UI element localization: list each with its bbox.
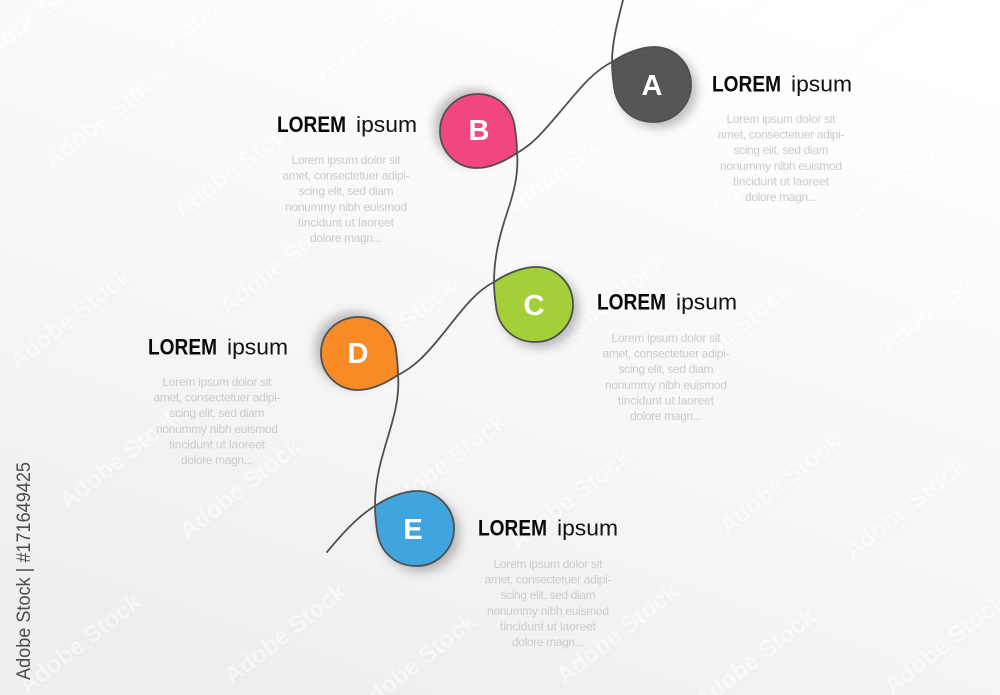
body E: tincidunt ut laoreet (500, 619, 597, 633)
drop E: E (403, 514, 423, 546)
heading B: LOREM (277, 112, 346, 137)
text block D (148, 334, 288, 467)
drop D: D (348, 338, 368, 370)
body D (154, 375, 280, 467)
body A: nonummy nibh euismod (720, 159, 842, 173)
stock id vertical text: Adobe Stock | #171649425 (14, 462, 35, 680)
text block E (478, 516, 618, 649)
body D: nonummy nibh euismod (156, 422, 278, 436)
body D: amet, consectetuer adipi- (154, 391, 280, 405)
body D: tincidunt ut laoreet (169, 437, 266, 451)
drop E (375, 491, 454, 566)
watermark pattern: Adobe Stock (551, 578, 684, 690)
watermark pattern: Adobe Stock (839, 453, 972, 565)
heading C: ipsum (676, 290, 737, 314)
body C: amet, consectetuer adipi- (602, 347, 730, 361)
body D: scing elit, sed diam (170, 406, 264, 420)
drop C (494, 267, 573, 342)
body D: Lorem ipsum dolor sit (162, 375, 272, 389)
watermark pattern: Adobe Stock (54, 403, 187, 515)
body B: nonummy nibh euismod (285, 200, 407, 214)
body C (602, 331, 730, 423)
heading C: LOREM (597, 290, 666, 314)
watermark pattern: Adobe Stock (214, 208, 347, 320)
body B (282, 153, 410, 245)
text block C (597, 290, 737, 423)
heading D: ipsum (227, 334, 288, 360)
body C: tincidunt ut laoreet (618, 393, 715, 407)
watermark pattern: Adobe Stock (497, 113, 630, 225)
watermark pattern: Adobe Stock (539, 248, 672, 360)
body A: tincidunt ut laoreet (733, 174, 830, 188)
body C: dolore magn... (630, 409, 702, 423)
body C: scing elit, sed diam (618, 362, 714, 376)
body B: amet, consectetuer adipi- (282, 169, 410, 183)
heading A: LOREM (712, 72, 781, 96)
drop B (440, 94, 517, 168)
body A: dolore magn... (745, 190, 817, 204)
body E: scing elit, sed diam (500, 588, 596, 602)
drop A (612, 47, 691, 122)
watermark pattern: Adobe Stock (169, 113, 302, 225)
watermark pattern: Adobe Stock (329, 273, 462, 385)
drop C: C (524, 290, 545, 322)
body C: nonummy nibh euismod (605, 378, 727, 392)
heading A: ipsum (791, 72, 852, 96)
watermark pattern: Adobe Stock (219, 578, 352, 690)
drop D (321, 317, 398, 390)
body A: scing elit, sed diam (734, 143, 828, 157)
body C: Lorem ipsum dolor sit (612, 331, 721, 345)
watermark pattern: Adobe Stock (504, 443, 637, 555)
body B: dolore magn... (310, 231, 382, 245)
body E (484, 557, 612, 649)
heading E: ipsum (557, 516, 618, 540)
heading D: LOREM (148, 334, 217, 360)
body A: Lorem ipsum dolor sit (726, 112, 836, 126)
watermark pattern: Adobe Stock (4, 263, 137, 375)
body D: dolore magn... (181, 453, 253, 467)
watermark pattern: Adobe Stock (664, 278, 797, 390)
body A: amet, consectetuer adipi- (718, 128, 844, 142)
drop B: B (469, 115, 489, 147)
body E: amet, consectetuer adipi- (484, 573, 612, 587)
connecting curve (327, 0, 623, 552)
body E: Lorem ipsum dolor sit (494, 557, 603, 571)
drop A: A (642, 70, 663, 102)
body E: dolore magn... (512, 635, 584, 649)
heading E: LOREM (478, 516, 547, 540)
heading B: ipsum (356, 112, 417, 137)
body B: scing elit, sed diam (298, 184, 394, 198)
watermark pattern: Adobe Stock (714, 428, 847, 540)
watermark pattern: Adobe Stock (39, 62, 172, 174)
watermark pattern: Adobe Stock (704, 108, 837, 220)
text block A (712, 72, 852, 204)
body A (718, 112, 844, 204)
watermark pattern: Adobe Stock (379, 408, 512, 520)
body B: tincidunt ut laoreet (298, 215, 395, 229)
watermark pattern: Adobe Stock (829, 123, 962, 235)
watermark pattern: Adobe Stock (174, 433, 307, 545)
body B: Lorem ipsum dolor sit (292, 153, 401, 167)
text block B (277, 112, 417, 245)
body E: nonummy nibh euismod (487, 604, 609, 618)
